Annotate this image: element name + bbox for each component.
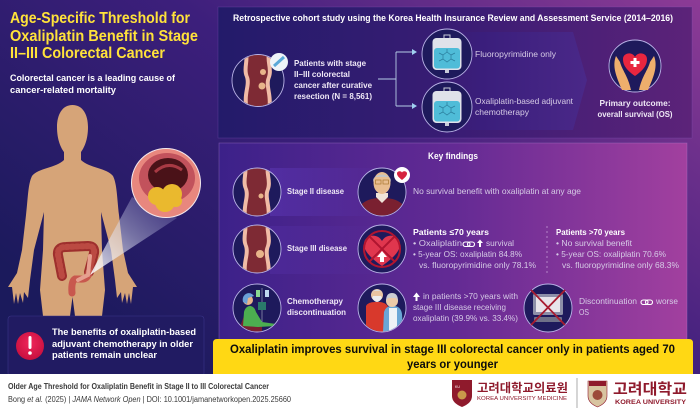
rising discontinuation finding: in patients >70 years with [423, 291, 518, 301]
intro text [10, 73, 176, 95]
icon: oxaliplatin bag [422, 82, 472, 132]
treatment chevron [436, 32, 587, 130]
citation: Older Age Threshold for Oxaliplatin Benefit in Stage II to III Colorectal Cancer [8, 382, 269, 391]
discontinuation outcome: Discontinuation [579, 296, 637, 306]
divider [576, 378, 578, 408]
outcome label: Primary outcome: [600, 98, 670, 108]
patients over 70: • 5-year OS: oxaliplatin 70.6% [556, 249, 667, 259]
conclusion banner: years or younger [407, 357, 498, 371]
icon: heart with prohibition [358, 225, 406, 273]
row bands [270, 168, 390, 274]
stage II label: Stage II disease [287, 186, 344, 196]
title [10, 10, 198, 62]
patients over 70: vs. fluoropyrimidine only 68.3% [562, 260, 680, 270]
callout: unclear benefit [8, 316, 204, 376]
cohort text: Patients with stage [294, 58, 366, 68]
rising discontinuation finding: stage III disease receiving [413, 302, 506, 312]
icon: tumour inside colon [130, 148, 202, 220]
patients 70 or under: survival [486, 238, 514, 248]
patients over 70 [556, 227, 680, 270]
logo: Korea University Medicine: KU [455, 385, 460, 389]
patients over 70: • No survival benefit [556, 238, 633, 248]
patients over 70: Patients >70 years [556, 227, 625, 237]
icon: patient receiving infusion [233, 284, 281, 332]
fluoropyrimidine label: Fluoropyrimidine only [475, 49, 557, 59]
callout text [52, 327, 196, 361]
discontinuation outcome [579, 296, 678, 317]
title: II–III Colorectal Cancer [10, 45, 165, 62]
title: Oxaliplatin Benefit in Stage [10, 28, 198, 45]
discontinuation label [287, 296, 346, 317]
patients 70 or under: • Oxaliplatin [413, 238, 462, 248]
logo: Korea University: 고려대학교 [613, 381, 687, 398]
citation: Bong et al. (2025) | JAMA Network Open | DOI: 10.1001/jamanetworkopen.2025.25660 [8, 395, 292, 404]
footer [0, 374, 700, 413]
conclusion banner [213, 339, 693, 374]
panel: study design [218, 7, 692, 138]
icon: older man [358, 167, 410, 216]
rising discontinuation finding: oxaliplatin (39.9% vs. 33.4%) [413, 313, 518, 323]
icon: stage III colon [232, 224, 282, 274]
arrow: split to treatment arms [378, 49, 417, 109]
human body with colon [8, 105, 137, 316]
discontinuation label: Chemotherapy [287, 296, 343, 306]
outcome label [598, 98, 673, 119]
intro text: Colorectal cancer is a leading cause of [10, 73, 176, 83]
callout text: patients remain unclear [52, 350, 157, 361]
logo: Korea University Medicine: KOREA UNIVERSITY MEDICINE [477, 396, 567, 402]
icon: heart in hands [609, 40, 661, 92]
icon: fluoropyrimidine bag [422, 29, 472, 79]
callout text: adjuvant chemotherapy in older [52, 339, 193, 350]
oxaliplatin label: chemotherapy [475, 107, 530, 117]
logo: Korea University Medicine [452, 380, 568, 407]
panel heading: Retrospective cohort study using the Korea Health Insurance Review and Assessment Service (2014–2016) [233, 13, 673, 23]
discontinuation label: discontinuation [287, 307, 346, 317]
patients 70 or under: Patients ≤70 years [413, 227, 489, 237]
oxaliplatin label: Oxaliplatin-based adjuvant [475, 96, 574, 106]
icon: crossed-out computer [524, 284, 572, 332]
patients 70 or under: • 5-year OS: oxaliplatin 84.8% [413, 249, 523, 259]
cohort text [294, 58, 372, 101]
patients 70 or under: vs. fluoropyrimidine only 78.1% [419, 260, 537, 270]
colon [58, 246, 94, 293]
outcome label: overall survival (OS) [598, 109, 673, 119]
stage II finding: No survival benefit with oxaliplatin at any age [413, 186, 581, 196]
key findings heading: Key findings [428, 151, 478, 162]
discontinuation outcome: worse [655, 296, 678, 306]
icon: stage II colon [232, 168, 282, 216]
panel: key findings [219, 143, 687, 340]
stage III label: Stage III disease [287, 243, 347, 253]
logo: Korea University [588, 381, 687, 407]
patients 70 or under [413, 227, 537, 270]
discontinuation outcome: OS [579, 307, 589, 317]
cohort text: resection (N = 8,561) [294, 91, 372, 101]
spotlight beam [90, 197, 177, 275]
cohort text: II–III colorectal [294, 69, 350, 79]
icon: colon with tumours [232, 50, 288, 110]
icon: warning [16, 332, 44, 360]
logo: Korea University Medicine: 고려대학교의료원 [477, 380, 568, 395]
oxaliplatin label [475, 96, 574, 117]
cohort text: cancer after curative [294, 80, 372, 90]
callout text: The benefits of oxaliplatin-based [52, 327, 196, 338]
icon: older couple [358, 284, 406, 332]
divider [546, 226, 548, 274]
citation [8, 382, 292, 404]
logo: Korea University: KOREA UNIVERSITY [615, 399, 687, 406]
intro text: cancer-related mortality [10, 85, 117, 95]
title: Age-Specific Threshold for [10, 10, 190, 27]
rising discontinuation finding [413, 291, 518, 323]
